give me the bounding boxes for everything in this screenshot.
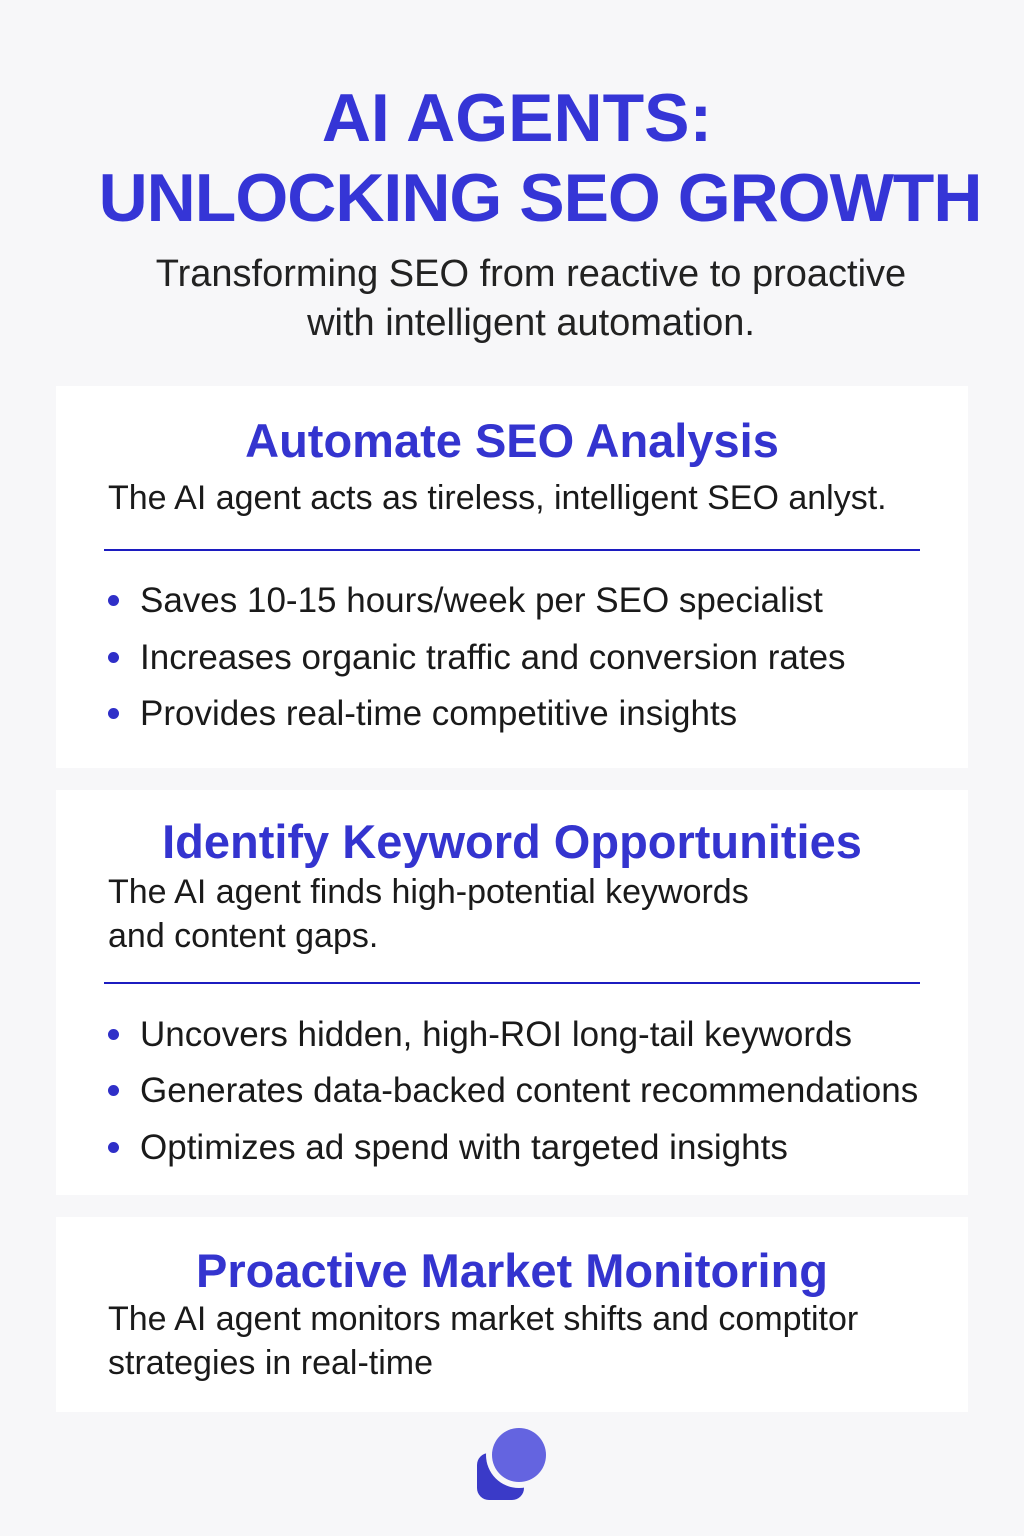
bullet list	[108, 581, 846, 733]
bullet list: Optimizes ad spend with targeted insights	[140, 1128, 788, 1167]
description: The AI agent acts as tireless, intelligent SEO anlyst.	[108, 479, 887, 517]
title: UNLOCKING SEO GROWTH	[99, 160, 981, 236]
panel: proactive market monitoring	[56, 1217, 968, 1412]
icon: logo	[477, 1428, 546, 1500]
bullet list: Provides real-time competitive insights	[140, 694, 737, 733]
description: and content gaps.	[108, 917, 378, 955]
title: AI AGENTS:	[322, 80, 712, 156]
bullet list: Generates data-backed content recommendations	[140, 1071, 918, 1110]
description	[108, 1300, 858, 1382]
bullet list	[108, 1015, 918, 1167]
heading: Proactive Market Monitoring	[196, 1244, 828, 1297]
bullet list: Saves 10-15 hours/week per SEO specialist	[140, 581, 823, 620]
description: The AI agent monitors market shifts and comptitor	[108, 1300, 858, 1338]
subtitle: with intelligent automation.	[307, 302, 755, 344]
subtitle	[156, 253, 906, 344]
heading: Identify Keyword Opportunities	[162, 815, 862, 868]
description: strategies in real-time	[108, 1344, 433, 1382]
title	[99, 80, 981, 236]
bullet list: Increases organic traffic and conversion rates	[140, 638, 846, 677]
subtitle: Transforming SEO from reactive to proactive	[156, 253, 906, 295]
panel: identify keyword opportunities	[56, 790, 968, 1195]
panel: automate SEO analysis	[56, 386, 968, 768]
description: The AI agent finds high-potential keywords	[108, 873, 749, 911]
description	[108, 873, 749, 955]
bullet list: Uncovers hidden, high-ROI long-tail keywords	[140, 1015, 852, 1054]
heading: Automate SEO Analysis	[245, 414, 779, 467]
